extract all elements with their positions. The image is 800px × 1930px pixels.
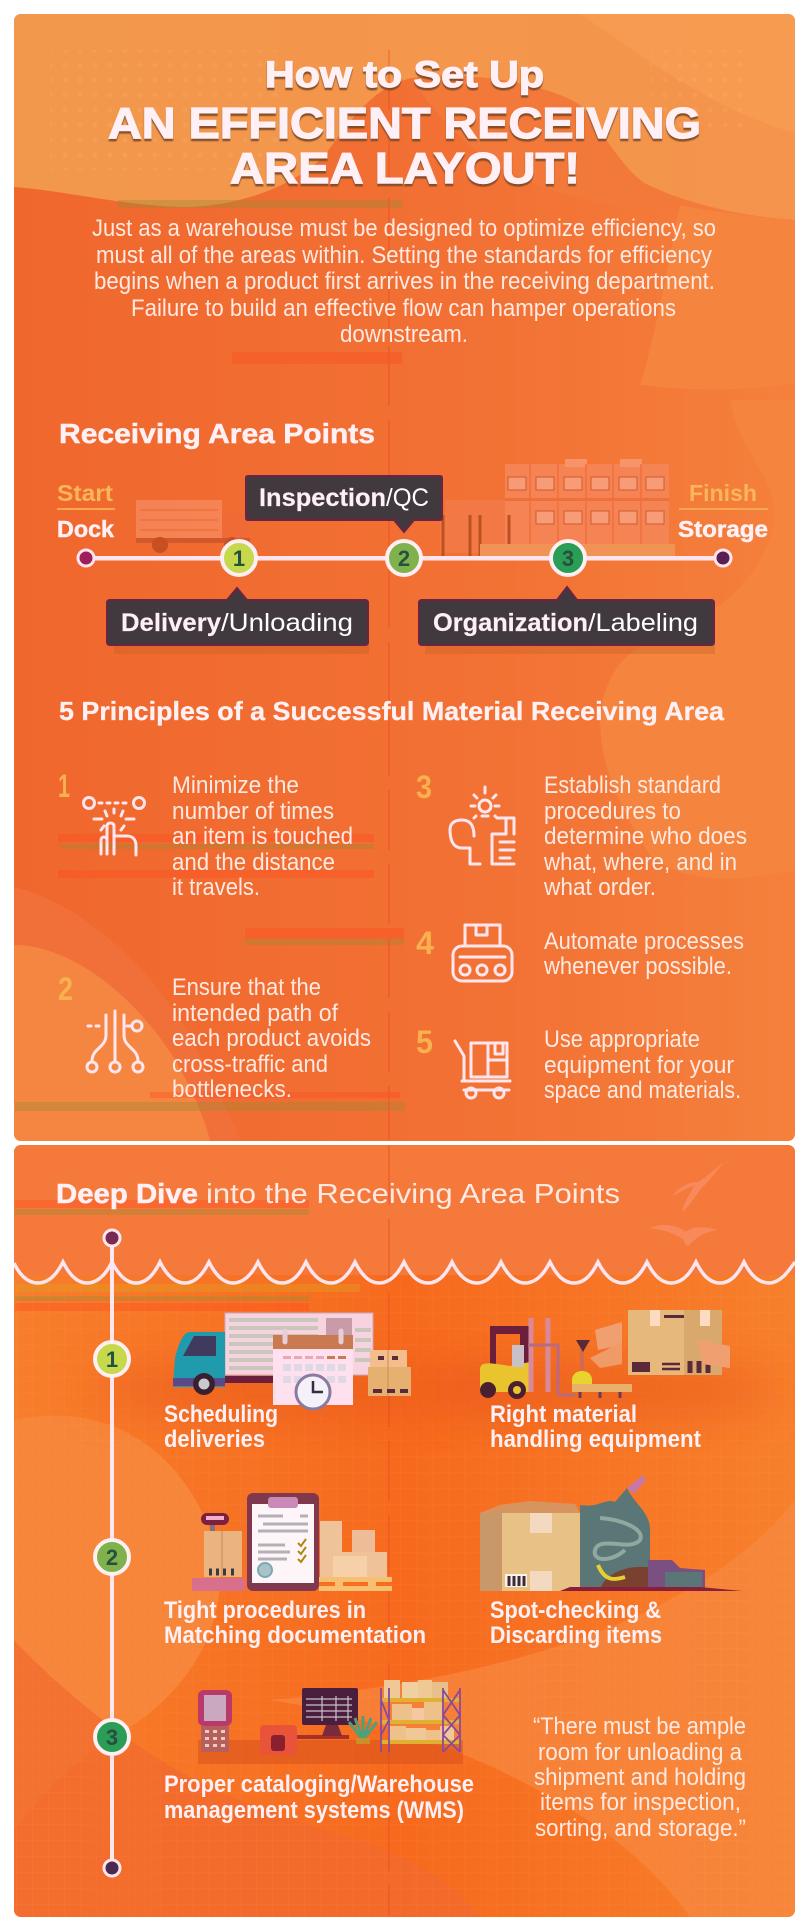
icon: routed paths bbox=[87, 1011, 143, 1072]
label: start dock: Dock bbox=[57, 516, 114, 542]
principle 2 bbox=[58, 971, 371, 1103]
node 2 bbox=[95, 1540, 129, 1574]
label: spot-checking: Discarding items bbox=[490, 1622, 662, 1649]
principle 3: 3 bbox=[416, 769, 432, 805]
label: spot-checking: Spot-checking & bbox=[490, 1597, 661, 1624]
callout: delivery unloading: /Unloading bbox=[221, 609, 353, 637]
node 1: 1 bbox=[233, 546, 245, 571]
callout: organization labeling bbox=[419, 587, 715, 654]
label: scheduling deliveries: Scheduling bbox=[164, 1401, 278, 1428]
node 3 bbox=[551, 541, 585, 575]
intro paragraph: Failure to build an effective flow can hamper operations bbox=[131, 295, 676, 322]
label: spot-checking bbox=[490, 1597, 662, 1649]
label: finish storage bbox=[678, 480, 768, 542]
principle 1: and the distance bbox=[172, 849, 335, 876]
illustration: box and trash bag bbox=[480, 1475, 742, 1591]
intro paragraph: downstream. bbox=[340, 321, 468, 348]
title: AREA LAYOUT! bbox=[230, 144, 580, 193]
quote: shipment and holding bbox=[534, 1764, 746, 1791]
principle 4: Automate processes bbox=[544, 928, 744, 955]
panel: deep dive bbox=[14, 1145, 795, 1917]
quote: room for unloading a bbox=[538, 1739, 743, 1766]
principle 2: intended path of bbox=[172, 1000, 338, 1027]
label: start dock: Start bbox=[57, 480, 113, 506]
icon: conveyor bbox=[453, 925, 512, 981]
label: proper cataloging bbox=[164, 1771, 474, 1824]
quote: sorting, and storage.” bbox=[535, 1815, 746, 1842]
principle 1: 1 bbox=[58, 768, 70, 804]
illustration: scanner, computer and shelving bbox=[198, 1680, 463, 1764]
callout: inspection QC bbox=[246, 476, 442, 532]
node 2: 2 bbox=[106, 1545, 118, 1570]
principle 2: cross-traffic and bbox=[172, 1051, 328, 1078]
title bbox=[108, 54, 701, 193]
heading: deep dive bbox=[58, 1182, 619, 1210]
intro paragraph: must all of the areas within. Setting the standards for efficiency bbox=[96, 242, 712, 269]
icon: hand cart bbox=[455, 1041, 510, 1098]
illustration: truck, calendar and boxes bbox=[173, 1313, 411, 1409]
node 2 bbox=[387, 541, 421, 575]
principle 2: Ensure that the bbox=[172, 974, 321, 1001]
callout: inspection QC: /QC bbox=[386, 484, 429, 512]
principle 1: number of times bbox=[172, 798, 334, 825]
illustration: forklift, pallet jack and box bbox=[480, 1310, 730, 1399]
quote: items for inspection, bbox=[540, 1789, 741, 1816]
node 1 bbox=[222, 541, 256, 575]
heading: five principles: 5 Principles of a Successful Material Receiving Area bbox=[59, 696, 725, 726]
node 1 bbox=[95, 1342, 129, 1376]
node 3: 3 bbox=[106, 1725, 118, 1750]
principle 5: equipment for your bbox=[544, 1052, 734, 1079]
heading: deep dive: Deep Dive bbox=[56, 1178, 198, 1209]
intro paragraph bbox=[92, 215, 716, 348]
heading: receiving area points: Receiving Area Points bbox=[59, 418, 375, 449]
principle 5: 5 bbox=[416, 1024, 433, 1060]
principle 3: Establish standard bbox=[544, 772, 721, 799]
intro paragraph: begins when a product first arrives in the receiving department. bbox=[94, 268, 715, 295]
panel: introduction and principles bbox=[14, 14, 795, 1141]
label: proper cataloging: management systems (WMS) bbox=[164, 1797, 464, 1824]
illustration: clipboard, scale and pallets bbox=[192, 1493, 392, 1591]
label: tight procedures: Tight procedures in bbox=[164, 1597, 366, 1624]
principle 1 bbox=[59, 774, 352, 895]
principle 2: each product avoids bbox=[172, 1025, 371, 1052]
principle 4: 4 bbox=[416, 925, 434, 961]
label: finish storage: Finish bbox=[689, 480, 757, 506]
title: How to Set Up bbox=[265, 54, 544, 95]
label: tight procedures: Matching documentation bbox=[164, 1622, 426, 1649]
callout: delivery unloading bbox=[107, 588, 369, 654]
timeline: vertical deep dive bbox=[95, 1230, 129, 1876]
label: proper cataloging: Proper cataloging/Warehouse bbox=[164, 1771, 474, 1798]
principle 2: 2 bbox=[58, 971, 73, 1007]
quote bbox=[533, 1713, 746, 1842]
label: right material handling equipment: Right material bbox=[490, 1401, 637, 1428]
principle 3: what, where, and in bbox=[543, 849, 737, 876]
quote: “There must be ample bbox=[533, 1713, 746, 1740]
icon: touch points bbox=[84, 798, 144, 855]
principle 4 bbox=[416, 925, 744, 981]
callout: inspection QC: Inspection bbox=[259, 484, 386, 512]
callout: organization labeling: Organization bbox=[433, 609, 588, 637]
icon: idea and document bbox=[450, 787, 514, 864]
principle 4: whenever possible. bbox=[543, 953, 732, 980]
callout: organization labeling: /Labeling bbox=[588, 609, 698, 637]
ghost band artifacts bbox=[15, 1145, 389, 1915]
decoration: scalloped wave divider bbox=[14, 1262, 795, 1283]
node 3 bbox=[95, 1720, 129, 1754]
principle 2: bottlenecks. bbox=[172, 1076, 292, 1103]
principle 3 bbox=[416, 769, 747, 901]
label: start dock bbox=[57, 485, 115, 538]
node 3: 3 bbox=[562, 546, 574, 571]
title: AN EFFICIENT RECEIVING bbox=[108, 99, 701, 148]
principle 3: determine who does bbox=[544, 823, 747, 850]
principle 3: what order. bbox=[543, 874, 656, 901]
principle 1: an item is touched bbox=[172, 823, 353, 850]
principle 5: Use appropriate bbox=[544, 1026, 700, 1053]
principle 1: Minimize the bbox=[172, 772, 299, 799]
timeline: receiving area points bbox=[78, 541, 731, 575]
ghost band artifacts bbox=[15, 50, 405, 1140]
heading: deep dive: into the Receiving Area Points bbox=[206, 1178, 620, 1209]
label: finish storage: Storage bbox=[678, 516, 768, 542]
callout: delivery unloading: Delivery bbox=[121, 609, 221, 637]
principle 5 bbox=[416, 1024, 741, 1104]
illustration: faded delivery truck bbox=[136, 500, 250, 553]
principle 5: space and materials. bbox=[544, 1077, 741, 1104]
label: right material handling equipment bbox=[490, 1401, 701, 1453]
label: scheduling deliveries bbox=[164, 1404, 277, 1447]
label: tight procedures bbox=[164, 1597, 426, 1649]
principle 3: procedures to bbox=[544, 798, 681, 825]
principle 1: it travels. bbox=[172, 874, 260, 901]
intro paragraph: Just as a warehouse must be designed to optimize efficiency, so bbox=[92, 215, 716, 242]
label: scheduling deliveries: deliveries bbox=[164, 1426, 265, 1453]
icon: birds bbox=[650, 1162, 724, 1246]
illustration: faded warehouse bbox=[440, 459, 675, 557]
node 1: 1 bbox=[106, 1347, 118, 1372]
node 2: 2 bbox=[398, 546, 410, 571]
label: right material handling equipment: handling equipment bbox=[490, 1426, 701, 1453]
